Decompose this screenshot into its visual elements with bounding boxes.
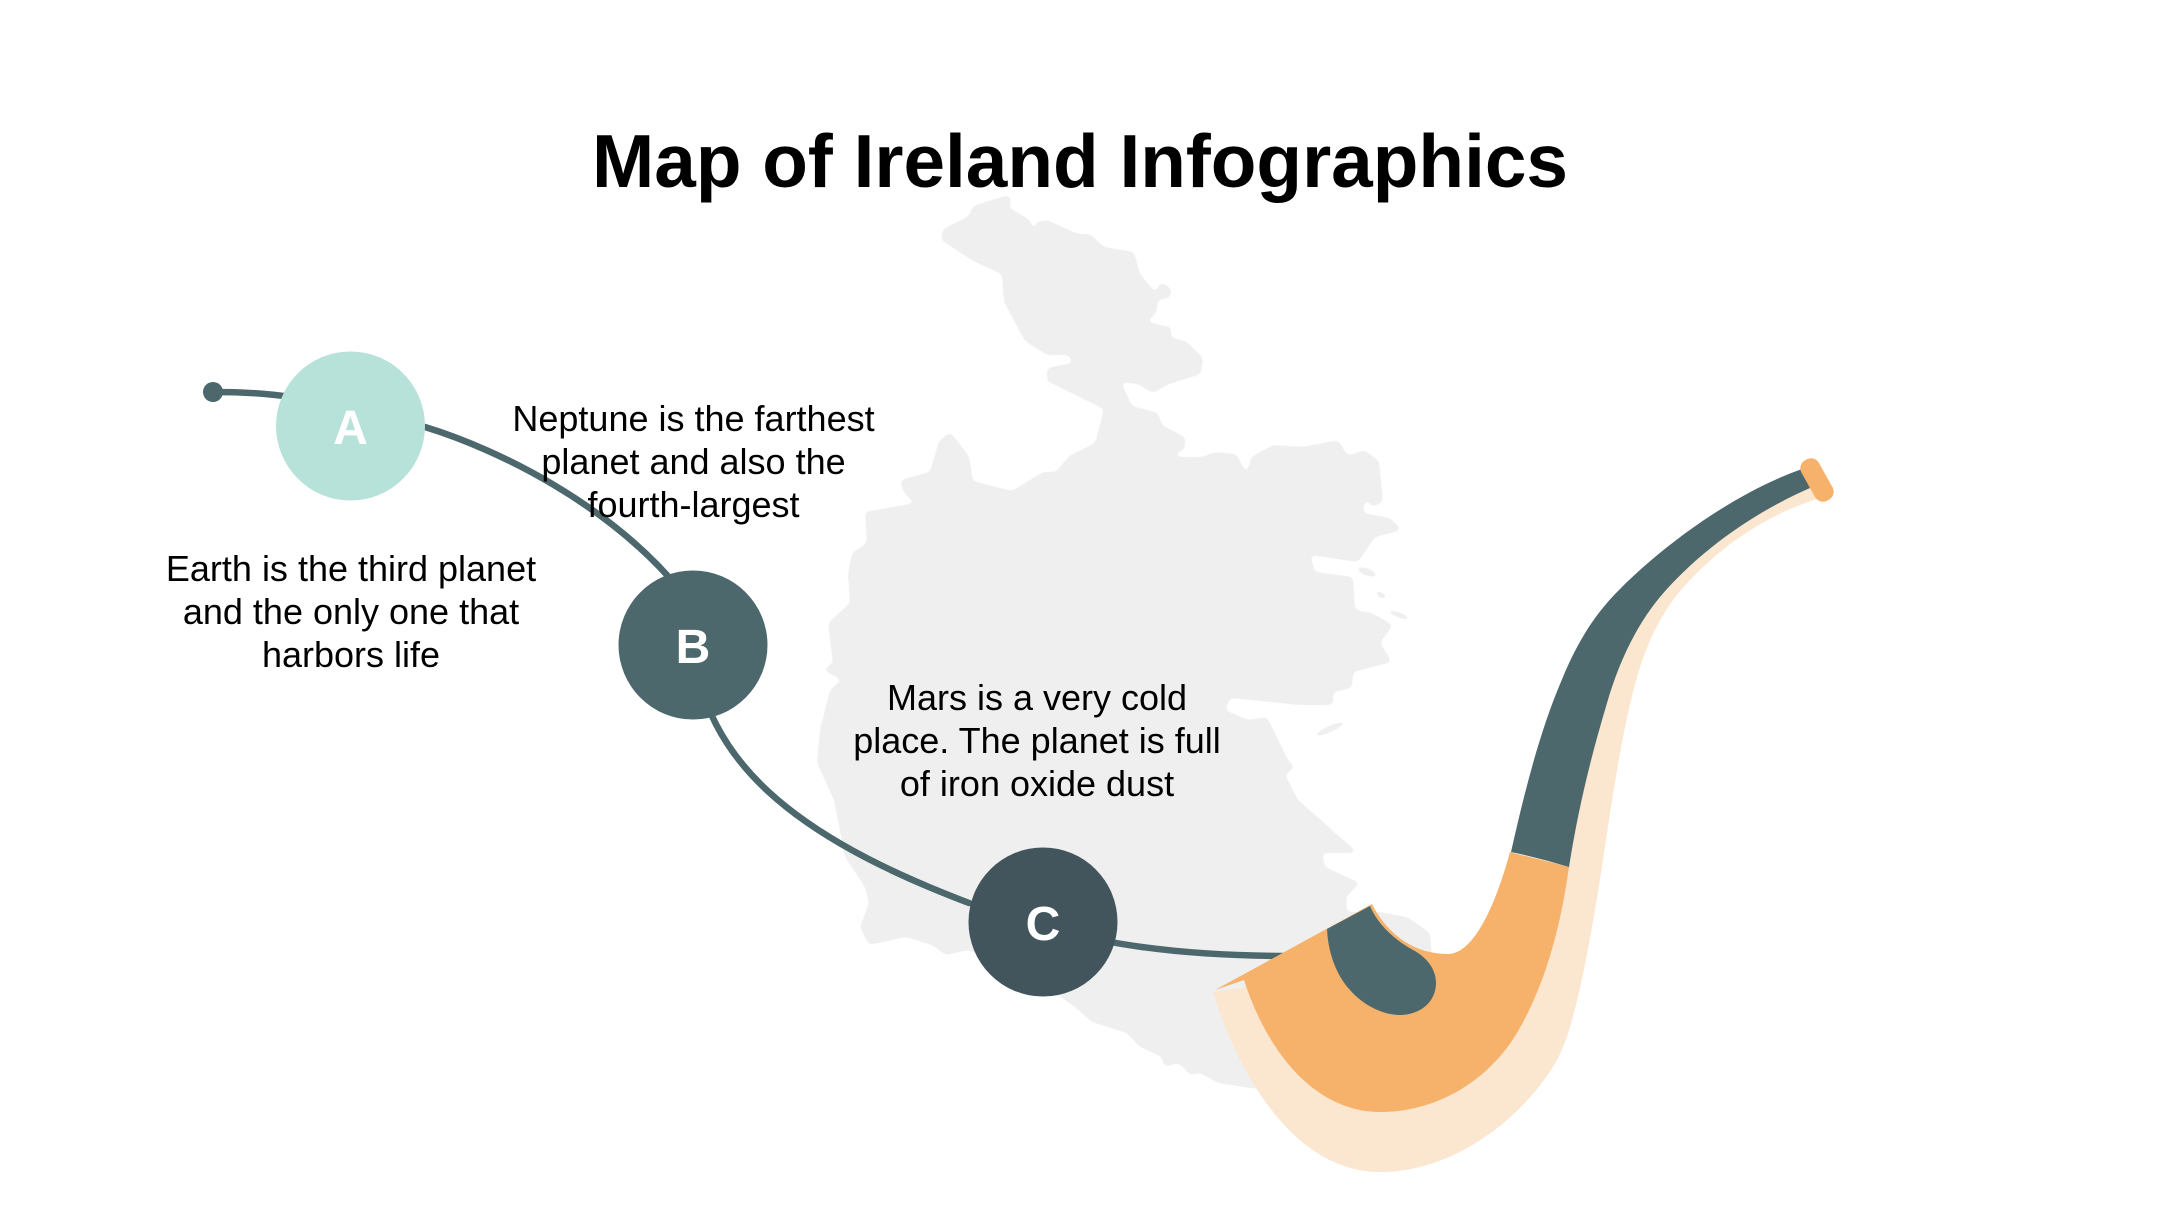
step C (968, 848, 1118, 996)
connector line (203, 382, 1290, 956)
text C: Mars is a very cold (887, 677, 1187, 718)
map of Ireland silhouette (817, 195, 1432, 1100)
text C: place. The planet is full (853, 720, 1221, 761)
start dot (203, 382, 223, 402)
text A: Earth is the third planet (166, 548, 536, 589)
pipe stem (1511, 469, 1810, 867)
step C: C (1026, 898, 1060, 951)
text A (166, 548, 536, 675)
pipe chamber (1327, 906, 1436, 1015)
text C (853, 677, 1221, 804)
islands (1316, 566, 1408, 737)
text A: and the only one that (183, 591, 519, 632)
step B (618, 570, 768, 720)
text B (512, 398, 875, 525)
pipe shadow (1213, 488, 1828, 1172)
text B: fourth-largest (587, 484, 800, 525)
pipe bowl (1215, 852, 1569, 1112)
text B: Neptune is the farthest (512, 398, 875, 439)
text B: planet and also the (541, 441, 846, 482)
text C: of iron oxide dust (900, 763, 1174, 804)
pipe mouthpiece (1797, 455, 1837, 505)
step A (276, 352, 425, 500)
step A: A (333, 402, 368, 455)
step B: B (676, 621, 710, 674)
text A: harbors life (262, 634, 440, 675)
icon: smoking pipe (1213, 455, 1837, 1172)
title: Map of Ireland Infographics (592, 119, 1568, 203)
